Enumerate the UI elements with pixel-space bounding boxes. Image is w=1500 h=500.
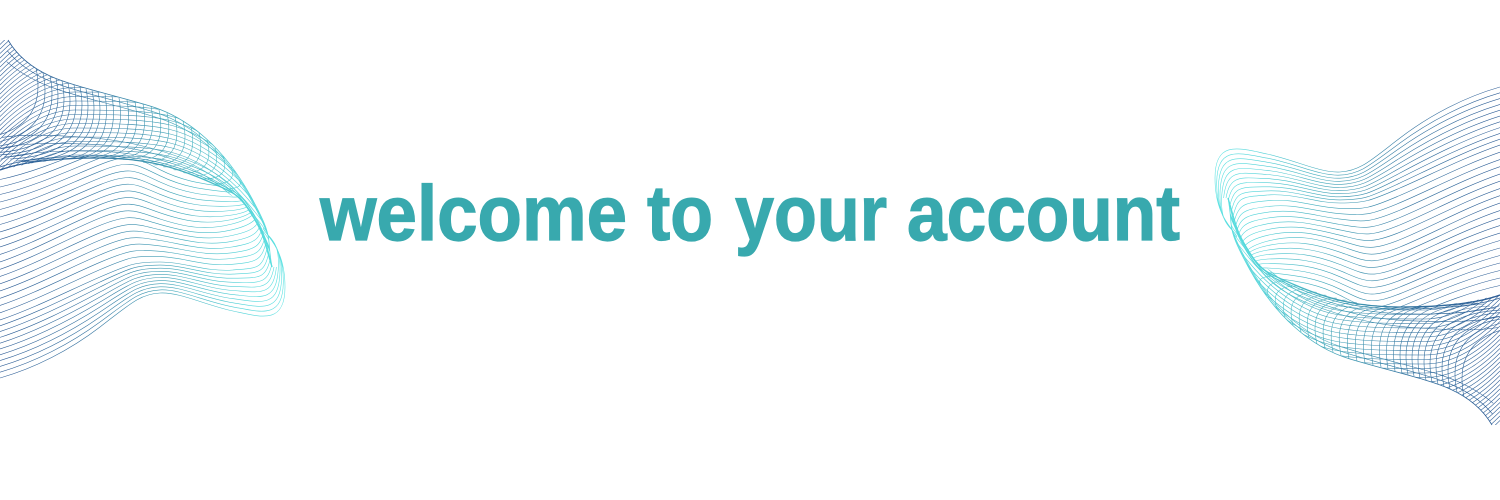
- wave ridge band: [0, 158, 272, 267]
- title: welcome: [319, 169, 627, 257]
- title: account: [907, 169, 1180, 257]
- title: to: [647, 169, 713, 257]
- wave outer fold lines: [0, 228, 285, 378]
- wave graphic: right: [1215, 87, 1500, 463]
- title: your: [735, 169, 887, 257]
- wave graphic: left: [0, 2, 285, 378]
- wave near-horizontal lines: [0, 2, 276, 255]
- title: [319, 169, 1180, 257]
- wave lower fan lines: [0, 145, 277, 349]
- wave upper mesh lines: [0, 2, 276, 270]
- wave curved cross lines: [0, 68, 240, 189]
